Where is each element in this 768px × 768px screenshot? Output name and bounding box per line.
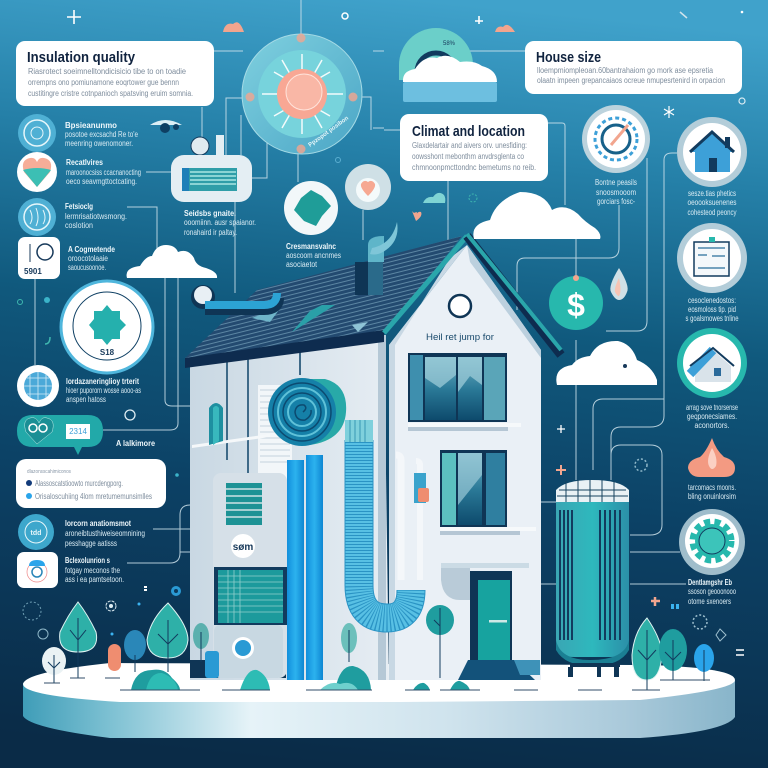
big ring icon: S18: [100, 348, 115, 357]
card: insulation quality: [16, 41, 214, 106]
card: climate and location: Climat and location: [412, 123, 525, 140]
lower window: [440, 450, 536, 535]
house icon: sesze.tias phetics: [688, 189, 736, 198]
dollar circle: [549, 275, 603, 330]
right caption: bottom: [688, 578, 736, 606]
card: insulation quality: orrempns ono pomiunamone eoqrtower gue bennn: [28, 78, 179, 87]
card: house size: lloempmiompleoan.60bantrahaiom go mork ase epsretia: [537, 66, 713, 75]
house icon: [677, 117, 747, 217]
speech pill: [17, 415, 155, 455]
round vent and building label: Heil ret jump for: [426, 332, 494, 343]
water drop icon: bling onuinlorsim: [688, 492, 736, 501]
corrugated duct: [345, 420, 411, 618]
water drop icon: [688, 438, 736, 501]
left item: meter card: [18, 237, 115, 279]
left item: meter card: saoucusoonoe.: [68, 263, 106, 272]
card: climate and location: chmnoonpmcttondnc bemetums no reib.: [412, 163, 536, 172]
roof duct: [191, 285, 277, 309]
teal house icon: arrag sove tnorsense: [686, 403, 738, 412]
left item: fan card: fotgay meconos the: [65, 566, 120, 575]
big ring icon: [61, 281, 153, 373]
globe item: anspen hatoss: [66, 395, 106, 404]
left item: fibre circle: coslotion: [65, 221, 93, 230]
left item: gauge circle: posotoe excsachd Re to'e: [65, 130, 138, 139]
left item: heart: maroonocsiss ccacnanocting: [66, 168, 141, 177]
document icon: cesoclenedostos:: [688, 296, 736, 305]
thermostat icon: snoosmooom: [596, 188, 636, 197]
thermostat icon: Bontne peasils: [595, 178, 637, 187]
left item: gauge circle: [18, 114, 138, 152]
sparkles and small decorations: [18, 10, 745, 655]
item: teal badge: Cresmansvalnc: [286, 242, 336, 251]
platform base: [23, 663, 735, 738]
document icon: [677, 223, 747, 323]
right caption: bottom: ssoson geooonooo: [688, 587, 736, 596]
left item: target circle: aroneibtusthiweiseomnining: [65, 529, 145, 538]
speech pill: 2314: [69, 427, 87, 436]
left item: gauge circle: meenring owenomoner.: [65, 139, 133, 148]
card: bullet list: Orisaloscuhiing 4lom mretumemunsimlles: [35, 492, 152, 501]
card: house size: [525, 41, 742, 94]
left wall: [190, 336, 389, 680]
item: air conditioning unit: [171, 135, 256, 237]
cloud gauge: [399, 28, 497, 102]
item: teal badge: [284, 181, 341, 269]
round vent and building label: [426, 295, 494, 343]
left item: heart: [17, 152, 141, 192]
left item: fibre circle: [18, 198, 127, 236]
card: climate and location: [400, 114, 548, 181]
document icon: s goalsmowes tnline: [686, 314, 739, 323]
logo: [231, 534, 255, 558]
cloud left: [127, 245, 217, 278]
trees and bushes: [42, 602, 714, 690]
item: teal badge: aoscoom ancnmes: [286, 251, 341, 260]
card: house size: olaatn impeen grepancaiaos ocreue nmupesrtenird in orpacion: [537, 76, 725, 85]
water drop small: [610, 268, 628, 300]
left item: meter card: 5901: [24, 267, 42, 276]
right caption: bottom: Dentlamgshr Eb: [688, 578, 732, 587]
card: insulation quality: custitingre cristre cotnpanioch spatsving eruim somnia.: [28, 89, 193, 98]
left item: fan card: [17, 552, 124, 588]
blue pipes: [287, 455, 323, 680]
left item: meter card: A Cogmetende: [68, 245, 115, 254]
wall conduits and switch: [396, 455, 429, 580]
item: air conditioning unit: ooomiinn. ausr spaianor.: [184, 218, 256, 227]
item: peach pin: [345, 164, 391, 210]
item: air conditioning unit: Seidsbs gnaite.: [184, 209, 236, 218]
cloud center: [473, 192, 600, 239]
cloud gauge: 58%: [443, 41, 456, 47]
left item: heart: oeco seavmgttoctcating.: [66, 177, 137, 186]
thermostat icon: [582, 105, 650, 206]
teal house icon: [677, 328, 747, 430]
upper window: [408, 353, 521, 431]
left item: target circle: tdd: [31, 530, 41, 537]
card: bullet list: Alassoscatstioowto murcdengporg.: [35, 479, 123, 488]
left item: fan card: Bclexolunrion s: [65, 556, 110, 565]
door: [441, 563, 540, 680]
logo: søm: [233, 542, 253, 553]
left item: meter card: oroocotolaaie: [68, 254, 108, 263]
left item: heart: Recatlvires: [66, 158, 103, 167]
card: climate and location: oowsshont mebonthm anvdrsglenta co: [412, 152, 524, 161]
left item: target circle: lorcorn anatiomsmot: [65, 519, 131, 528]
spiral vent: [268, 378, 346, 446]
thermostat icon: gorciars fosc-: [597, 197, 635, 206]
dollar circle: $: [567, 287, 585, 323]
globe item: lordazaneringlioy trterit: [66, 377, 139, 386]
indoor unit: [213, 473, 287, 678]
left item: target circle: [18, 514, 145, 550]
chimney and smoke: [355, 222, 398, 295]
house building: [190, 245, 541, 680]
gable wall: [389, 245, 541, 680]
cloud right: [556, 341, 657, 385]
outdoor heat pump unit: [556, 480, 629, 677]
document icon: eosmoloss tip. pid: [688, 305, 736, 314]
left item: fan card: ass i ea pamtsetoon.: [65, 575, 124, 584]
left item: target circle: pesshagge aatisss: [65, 539, 117, 548]
sun dial: Ppzopot posibon: [308, 115, 350, 149]
left item: fibre circle: Fetsioclg: [65, 202, 93, 211]
sun dial: [242, 34, 362, 154]
card: climate and location: Glaxdelartair and aivers orv. unesfiding:: [412, 141, 527, 150]
card: insulation quality: Riasrotect soeimnelltondicisicio tibe to on toadie: [28, 67, 187, 76]
item: air conditioning unit: ronahaird ir paltay.: [184, 228, 237, 237]
card: house size: House size: [536, 49, 601, 66]
roof: [185, 234, 561, 368]
globe item: hioer pupororn wosse aooo-as: [66, 386, 141, 395]
card: bullet list: [16, 459, 166, 508]
connector lines: [35, 0, 686, 584]
water drop icon: tarcomacs moons.: [688, 483, 736, 492]
teal house icon: aconortors.: [694, 421, 730, 430]
left item: fibre circle: lermrisatiotwsmong.: [65, 212, 127, 221]
right caption: bottom: otome sxenoers: [688, 597, 731, 606]
speech pill: A lalkimore: [116, 439, 155, 448]
teal house icon: geqponecsiames.: [687, 412, 737, 421]
card: insulation quality: Insulation quality: [27, 49, 136, 66]
house icon: oeoooksuenenes: [688, 198, 736, 207]
left item: gauge circle: Bpsieanunmo: [65, 121, 117, 130]
item: teal badge: asociaetot: [286, 260, 318, 269]
card: bullet list: dlazonsscahimiconos: [27, 469, 71, 475]
gear icon: [679, 509, 745, 575]
house icon: cohesteod peoncy: [688, 208, 736, 217]
globe item: [17, 365, 141, 407]
